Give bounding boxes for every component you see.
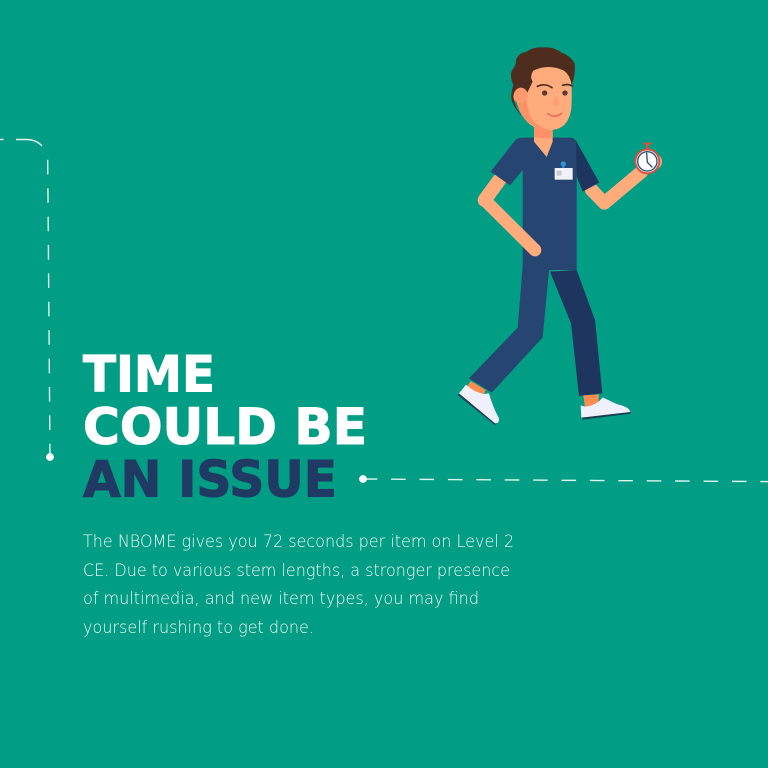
- title: COULD BE: [83, 398, 367, 456]
- title: AN ISSUE: [83, 451, 337, 509]
- upper body: [485, 47, 662, 270]
- id badge: [555, 161, 573, 180]
- body text: yourself rushing to get done.: [83, 618, 314, 637]
- ear: [513, 88, 528, 103]
- upper arm: [485, 180, 499, 200]
- dashed connector: heading to right edge: [359, 475, 768, 483]
- title: TIME: [83, 346, 215, 404]
- eyes and brows: [537, 84, 572, 96]
- body text: [83, 532, 514, 637]
- stopwatch: [634, 143, 660, 174]
- neck: [534, 123, 553, 157]
- nose: [552, 95, 560, 106]
- dark sleeve: [576, 141, 599, 192]
- body text: of multimedia, and new item types, you may find: [83, 589, 479, 608]
- smile: [548, 113, 562, 116]
- dashed connector: top left to heading: [0, 140, 54, 461]
- head: [516, 60, 572, 130]
- character: nurse with stopwatch: [458, 47, 662, 425]
- body text: CE. Due to various stem lengths, a stronger presence: [83, 561, 510, 580]
- hair: [511, 47, 575, 116]
- title: [83, 346, 367, 509]
- legs and shoes: [458, 267, 631, 425]
- raised arm: [592, 172, 642, 203]
- body text: The NBOME gives you 72 seconds per item on Level 2: [83, 532, 514, 551]
- scrubs top: [491, 138, 577, 270]
- hand: [646, 154, 662, 170]
- forearm on hip: [485, 200, 535, 250]
